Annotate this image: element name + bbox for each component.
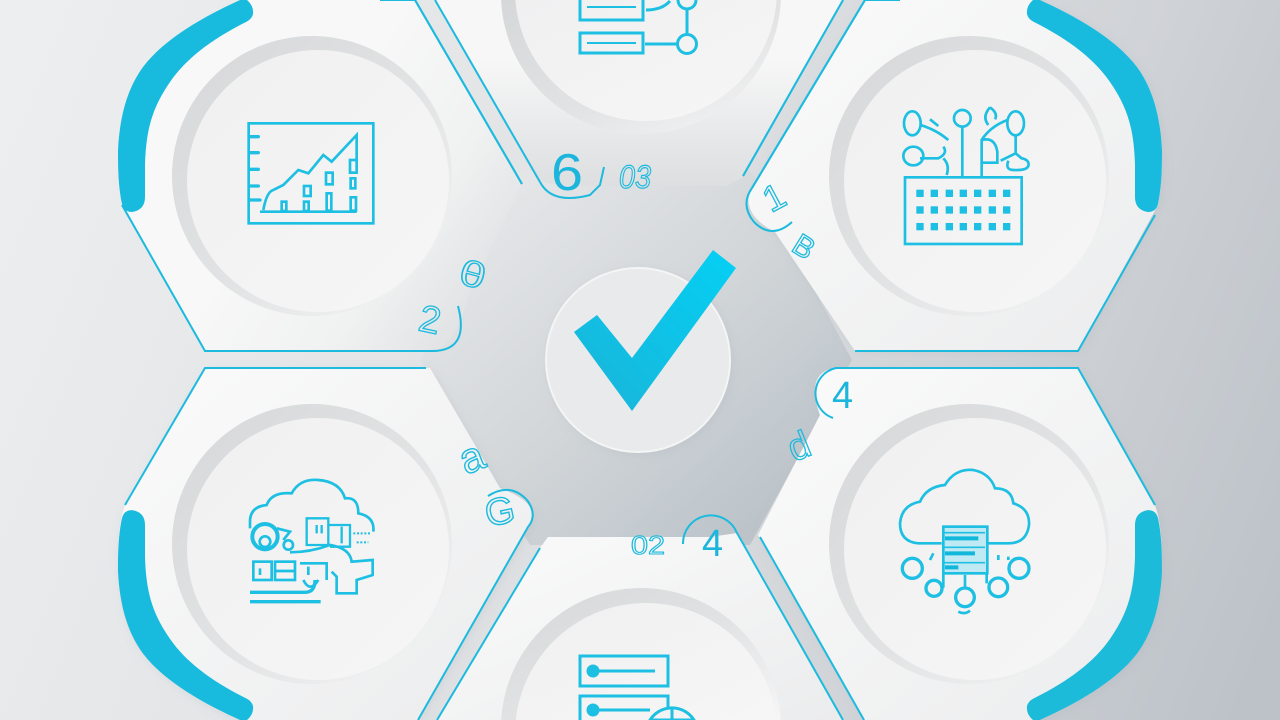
- number label: 6: 6: [551, 144, 583, 202]
- hexagon body: [748, 0, 1162, 351]
- panel: top left hexagon: [118, 0, 522, 351]
- number label: 2: 2: [415, 298, 445, 343]
- panel: bottom left hexagon: [118, 368, 533, 720]
- inner ring: [829, 404, 1109, 684]
- inner disc: [187, 418, 449, 680]
- panel: bottom right hexagon: [758, 368, 1162, 720]
- number label: 1: 1: [756, 174, 792, 220]
- inner ring: [501, 0, 781, 134]
- inner disc: [844, 50, 1106, 312]
- inner disc: [515, 0, 777, 121]
- number label: 6 lower left: G: [481, 489, 519, 536]
- badge disc: [546, 268, 730, 452]
- small label near lower left 6: a: [452, 431, 492, 483]
- number label: 4 bottom: 4: [702, 523, 723, 565]
- icon: growth chart: [249, 123, 373, 223]
- cyan accent band: [118, 510, 253, 720]
- inner ring: [172, 36, 452, 316]
- panel: top hexagon: [415, 0, 865, 198]
- panel: bottom hexagon: [437, 515, 843, 720]
- cyan outline: [743, 0, 1155, 351]
- icon: cloud with devices: [250, 480, 373, 602]
- inner disc: [516, 603, 776, 720]
- inner disc: [844, 418, 1106, 680]
- cyan outline: [415, 0, 865, 198]
- cyan outline: [760, 368, 1155, 720]
- cyan accent band: [1027, 510, 1162, 720]
- number label: 4 right: 4: [832, 375, 853, 417]
- hexagon body: [118, 0, 522, 351]
- small label near 4 right: d: [782, 423, 817, 470]
- icon: network server rows: [580, 0, 696, 54]
- icon: check mark: [574, 250, 736, 411]
- small label near 6: 03: [619, 159, 651, 195]
- center badge: [546, 250, 736, 452]
- small label near 1: B: [786, 228, 821, 267]
- inner ring: [829, 36, 1109, 316]
- icon: list with globe: [580, 656, 694, 720]
- panel: top right hexagon: [743, 0, 1162, 351]
- cyan accent band: [118, 0, 253, 212]
- cyan outline: [437, 515, 843, 720]
- inner ring: [172, 404, 452, 684]
- cyan accent band: [1027, 0, 1162, 212]
- cyan outline: [125, 368, 533, 720]
- inner disc: [187, 50, 449, 312]
- hexagon body: [435, 0, 843, 186]
- inner ring: [501, 588, 781, 720]
- cyan outline: [122, 0, 522, 351]
- hexagon body: [437, 533, 843, 720]
- icon: keyboard with nodes: [903, 107, 1029, 244]
- icon: cloud server network: [900, 470, 1029, 613]
- small label 02: 02: [631, 530, 665, 560]
- hexagon body: [118, 368, 533, 720]
- small label near 2: θ: [455, 251, 491, 297]
- center backdrop: [420, 170, 852, 545]
- hexagon body: [758, 368, 1162, 720]
